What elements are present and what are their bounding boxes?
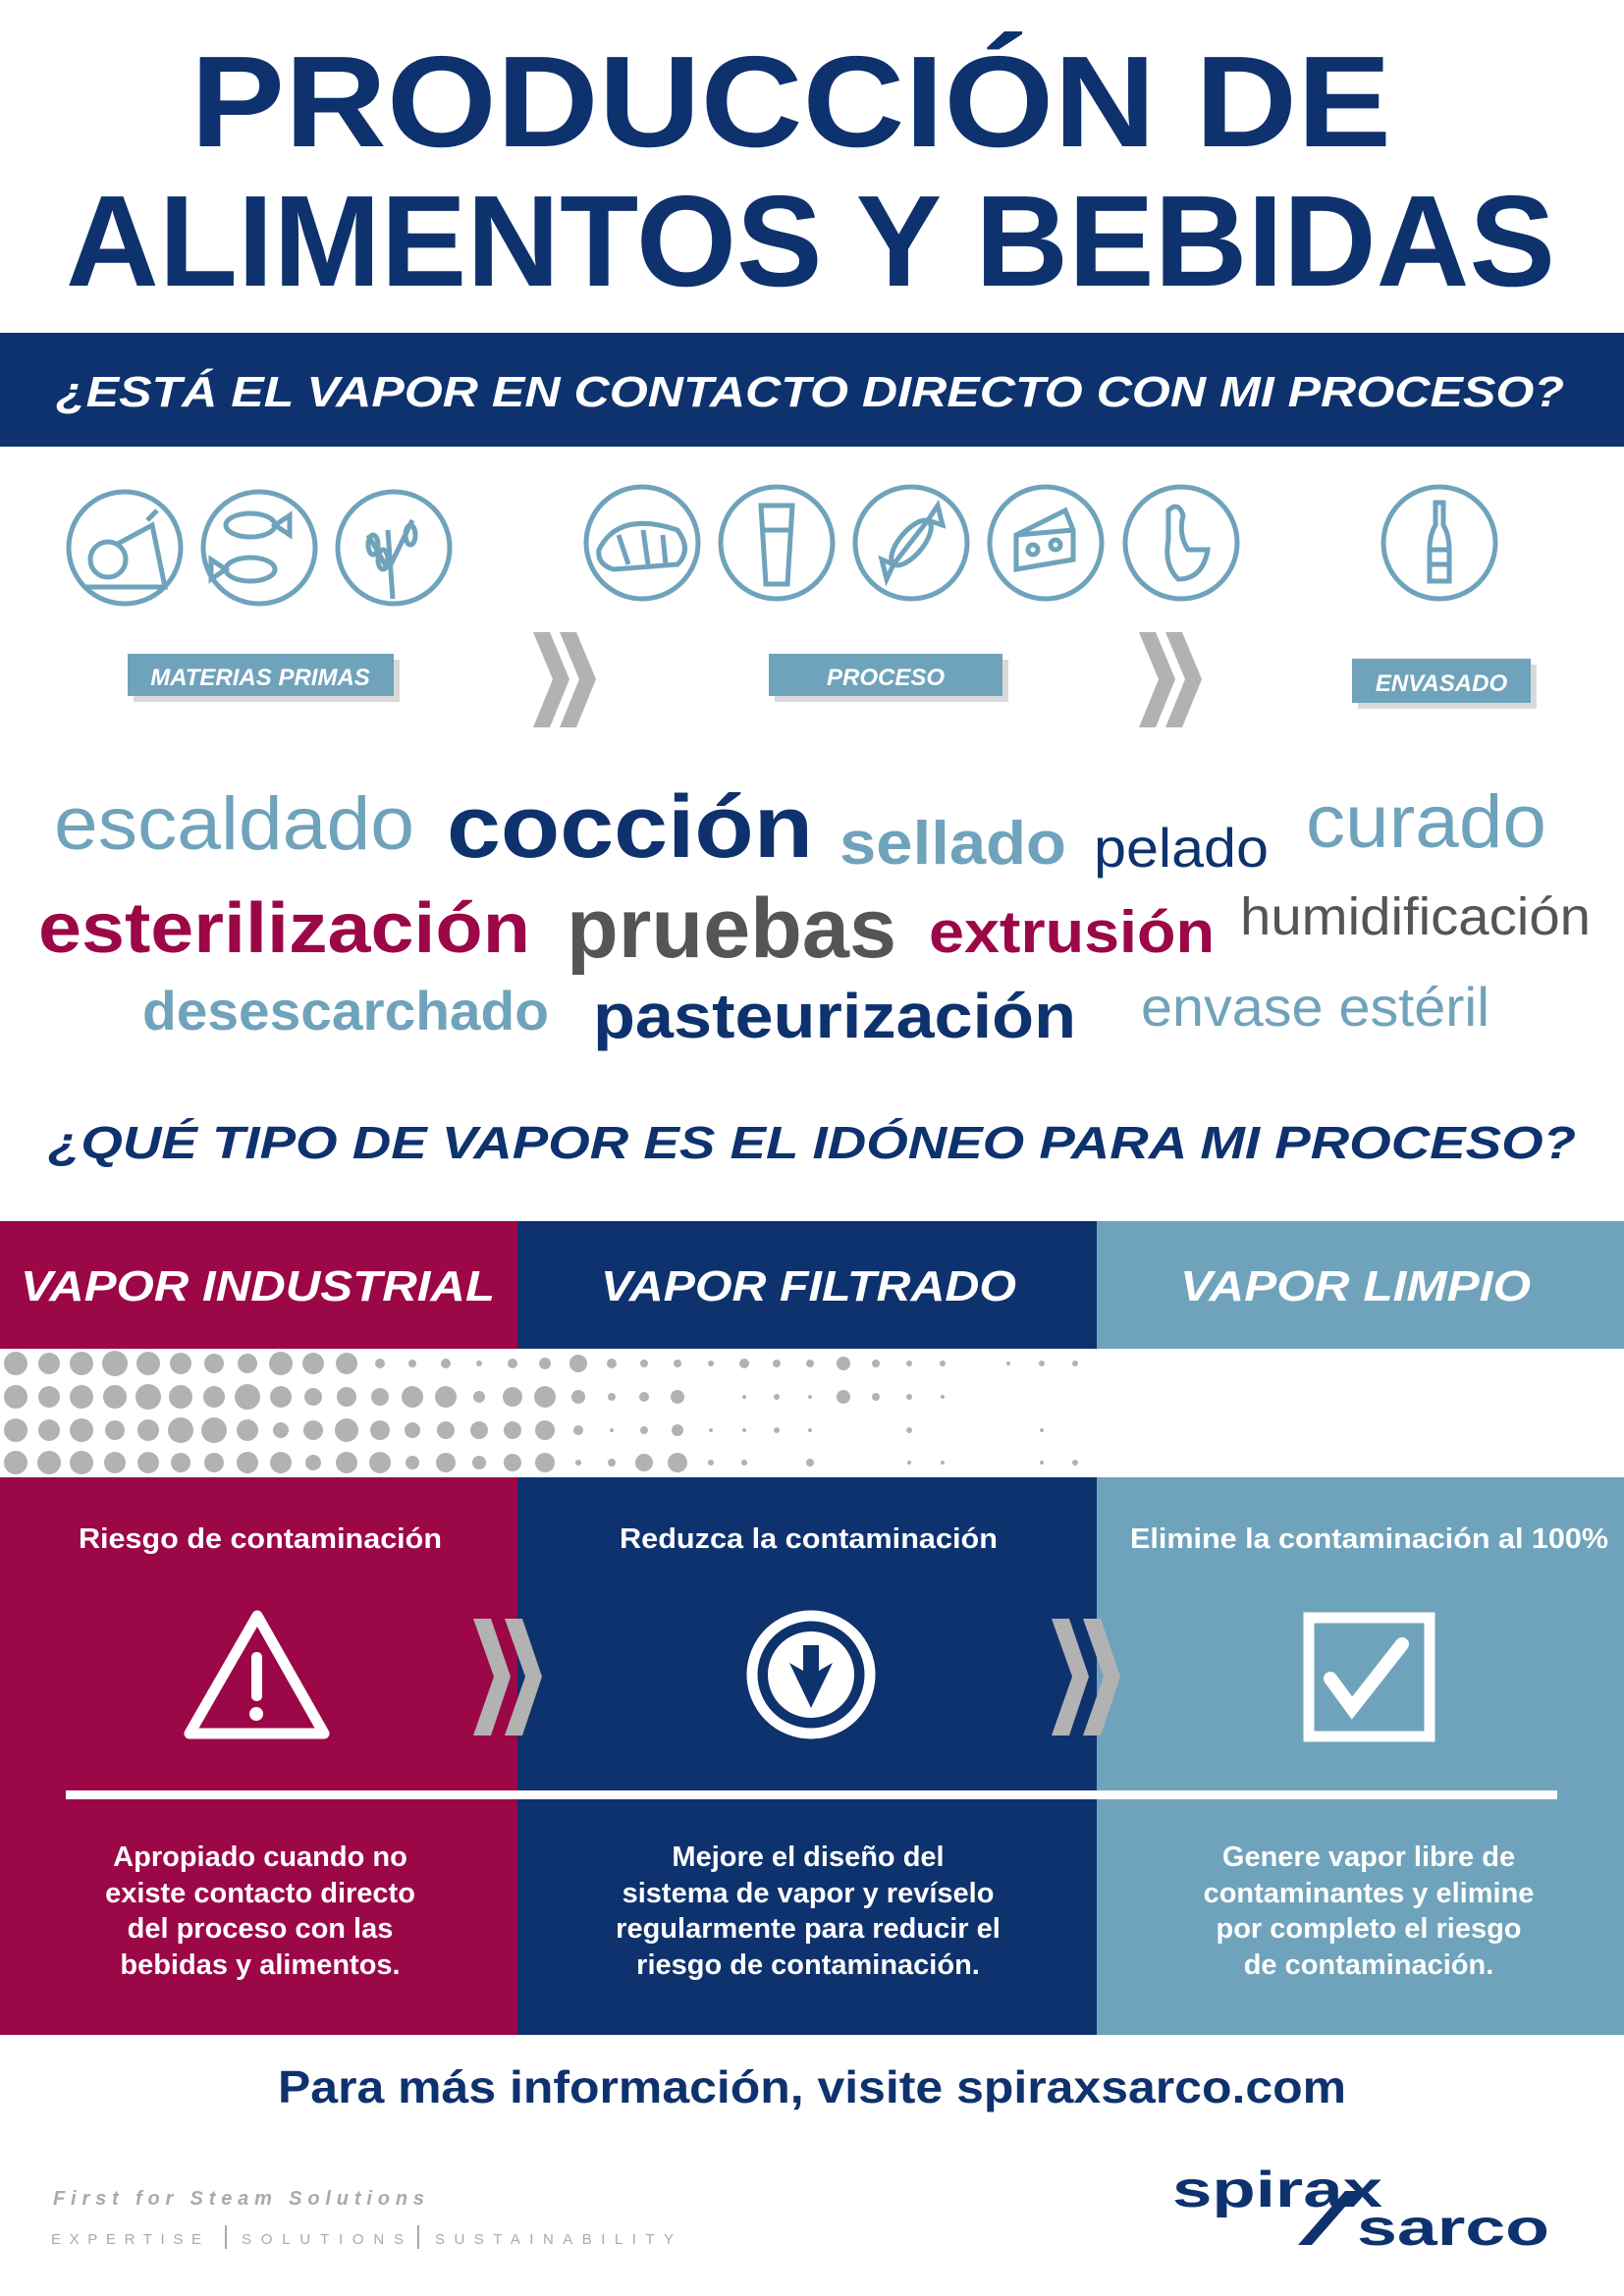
panel: vapor limpio	[1097, 1477, 1624, 2035]
icon: duck	[1125, 487, 1237, 599]
tagline: EXPERTISE	[51, 2231, 201, 2248]
word cloud: extrusión	[929, 899, 1215, 965]
label: envasado	[1352, 659, 1537, 709]
panel: vapor limpio: contaminantes y elimine	[1204, 1878, 1534, 1909]
footer: website: Para más información, visite spiraxsarco.com	[278, 2061, 1346, 2112]
label: proceso	[769, 654, 1008, 702]
banner: question 1	[0, 333, 1624, 447]
logo: spirax sarco: spirax	[1172, 2162, 1382, 2218]
word cloud: cocción	[447, 778, 813, 877]
word cloud: escaldado	[54, 782, 414, 866]
word cloud: sellado	[839, 810, 1066, 878]
tagline: SUSTAINABILITY	[435, 2231, 674, 2248]
label: materias primas	[128, 654, 400, 702]
icon: warning triangle	[189, 1616, 324, 1734]
arrow: chevron 2	[1139, 632, 1202, 727]
word cloud: humidificación	[1240, 887, 1591, 946]
panel: vapor industrial: bebidas y alimentos.	[120, 1949, 401, 1981]
dot gradient pattern	[4, 1351, 1078, 1474]
label: materias primas: MATERIAS PRIMAS	[150, 665, 370, 691]
panel: vapor industrial: Riesgo de contaminación	[79, 1523, 442, 1555]
icon: cheese	[990, 487, 1102, 599]
word cloud: curado	[1306, 780, 1546, 864]
column headers: VAPOR FILTRADO	[601, 1262, 1016, 1310]
arrow: chevron 1	[533, 632, 596, 727]
panel: vapor filtrado: Mejore el diseño del	[672, 1842, 945, 1873]
panel: vapor industrial	[0, 1477, 517, 2035]
column headers	[0, 1221, 1624, 1349]
icon: bottle	[1383, 487, 1495, 599]
panel: vapor filtrado	[517, 1477, 1097, 2035]
icons: food categories	[69, 487, 1495, 604]
tagline	[51, 2188, 674, 2249]
arrow: panel chevron 1	[473, 1619, 542, 1735]
logo: spirax sarco	[1172, 2162, 1549, 2257]
column headers: VAPOR LIMPIO	[1180, 1262, 1531, 1310]
column headers: VAPOR INDUSTRIAL	[21, 1262, 495, 1310]
icon: fruit and carrot	[69, 492, 181, 604]
title: ALIMENTOS Y BEBIDAS	[66, 169, 1555, 313]
word cloud: desescarchado	[142, 980, 549, 1041]
panel: vapor industrial: del proceso con las	[128, 1913, 393, 1945]
panel: vapor industrial: Apropiado cuando no	[113, 1842, 407, 1873]
panel: vapor limpio: Elimine la contaminación al 100%	[1130, 1523, 1608, 1555]
icon: sweet	[855, 487, 967, 599]
icon: checkbox	[1309, 1618, 1430, 1736]
icon: fish	[203, 492, 315, 604]
label: envasado: ENVASADO	[1376, 670, 1507, 697]
word cloud: pruebas	[567, 881, 896, 976]
heading: question 2: ¿QUÉ TIPO DE VAPOR ES EL IDÓNEO PARA MI PROCESO?	[48, 1117, 1576, 1168]
icon: down arrow circle	[752, 1616, 870, 1734]
panel: vapor filtrado: Reduzca la contaminación	[620, 1523, 998, 1555]
arrow: panel chevron 2	[1052, 1619, 1120, 1735]
word cloud	[38, 778, 1591, 1051]
icon: bread	[586, 487, 698, 599]
word cloud: envase estéril	[1141, 976, 1489, 1038]
panel: vapor industrial: existe contacto directo	[105, 1878, 415, 1909]
label: proceso: PROCESO	[827, 665, 945, 691]
logo: spirax sarco: sarco	[1357, 2200, 1549, 2257]
icon: glass	[721, 487, 833, 599]
tagline: First for Steam Solutions	[53, 2188, 424, 2210]
panel: vapor filtrado: riesgo de contaminación.	[636, 1949, 980, 1981]
panel: vapor limpio: por completo el riesgo	[1216, 1913, 1522, 1945]
panel: vapor limpio: de contaminación.	[1244, 1949, 1493, 1981]
banner: question 1: ¿ESTÁ EL VAPOR EN CONTACTO DIRECTO CON MI PROCESO?	[56, 367, 1564, 416]
word cloud: pelado	[1094, 817, 1269, 879]
panel: vapor filtrado: regularmente para reducir el	[616, 1913, 1001, 1945]
panel: vapor limpio: Genere vapor libre de	[1222, 1842, 1515, 1873]
tagline: SOLUTIONS	[242, 2231, 404, 2248]
panel: vapor filtrado: sistema de vapor y revíselo	[623, 1878, 994, 1909]
title	[66, 29, 1555, 313]
word cloud: esterilización	[38, 889, 530, 968]
title: PRODUCCIÓN DE	[190, 29, 1391, 174]
word cloud: pasteurización	[593, 981, 1076, 1051]
icon: wheat	[338, 492, 450, 604]
